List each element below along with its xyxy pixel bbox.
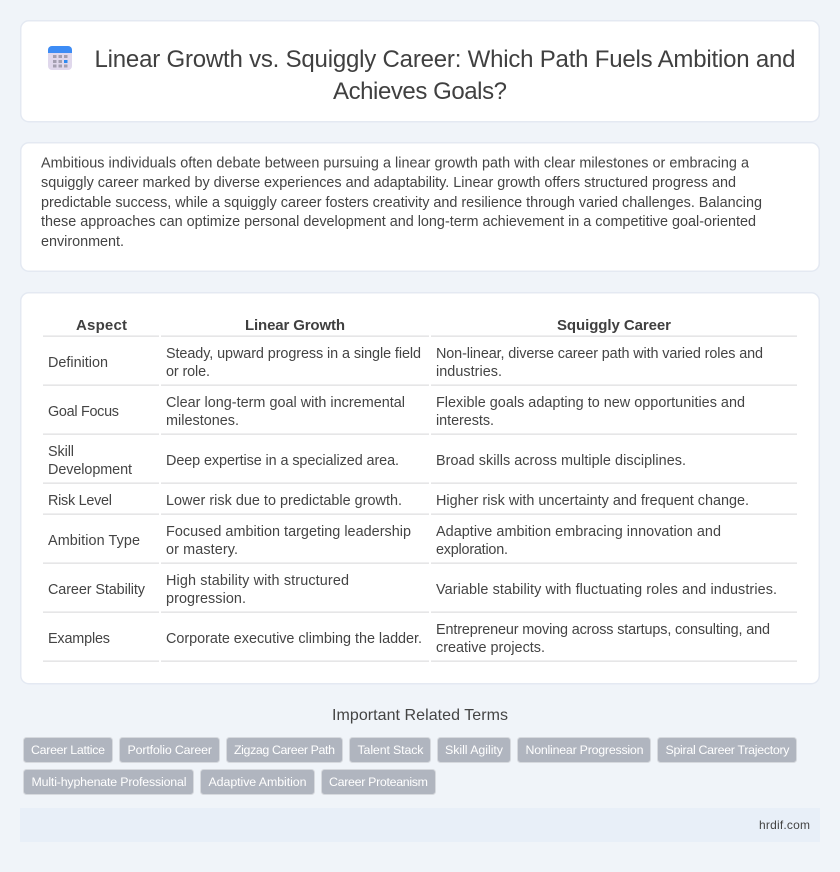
row: Ambition Type: or mastery. xyxy=(166,542,238,558)
panel: comparison table xyxy=(21,293,819,684)
row: Examples xyxy=(48,622,770,656)
row: Ambition Type: exploration. xyxy=(436,542,508,558)
table header: Squiggly Career xyxy=(557,317,671,334)
tag xyxy=(350,738,430,762)
row: Ambition Type: Ambition Type xyxy=(48,533,140,549)
tag: Multi-hyphenate Professional xyxy=(32,775,186,789)
table header: Aspect xyxy=(76,317,127,334)
table header xyxy=(76,317,671,334)
tag xyxy=(226,738,342,762)
table header: Linear Growth xyxy=(245,317,345,334)
panel: header xyxy=(21,21,819,122)
row: Goal Focus: Flexible goals adapting to new opportunities and xyxy=(436,395,745,411)
row: Skill Development: Deep expertise in a specialized area. xyxy=(166,453,399,469)
row: Ambition Type: Focused ambition targeting leadership xyxy=(166,524,411,540)
tag: Portfolio Career xyxy=(128,743,212,757)
title: Achieves Goals? xyxy=(333,78,507,105)
tag: Career Proteanism xyxy=(329,775,428,789)
row: Goal Focus: milestones. xyxy=(166,413,239,429)
row: Risk Level: Higher risk with uncertainty and frequent change. xyxy=(436,493,749,509)
row: Risk Level xyxy=(48,493,749,509)
title: Linear Growth vs. Squiggly Career: Which Path Fuels Ambition and xyxy=(94,46,796,73)
row: Career Stability: Career Stability xyxy=(48,582,146,598)
icon: calendar xyxy=(48,46,72,70)
row: Career Stability: progression. xyxy=(166,591,246,607)
row: Career Stability: High stability with structured xyxy=(166,573,349,589)
row: Definition: Non-linear, diverse career path with varied roles and xyxy=(436,346,763,362)
row: Skill Development: Broad skills across multiple disciplines. xyxy=(436,453,686,469)
row: Goal Focus: interests. xyxy=(436,413,494,429)
tag xyxy=(322,770,436,794)
tag xyxy=(24,738,112,762)
tag xyxy=(518,738,650,762)
row: Ambition Type xyxy=(48,524,721,558)
row: Ambition Type: Adaptive ambition embracing innovation and xyxy=(436,524,721,540)
footer xyxy=(20,808,820,842)
panel: intro text: Ambitious individuals often debate between pursuing a linear growth path with clear milestones or embracing a xyxy=(41,156,749,172)
heading: related terms: Important Related Terms xyxy=(332,707,508,724)
row: Career Stability xyxy=(48,573,777,607)
footer: hrdif.com xyxy=(759,818,810,832)
tag: Nonlinear Progression xyxy=(526,743,644,757)
panel: intro text: predictable success, while a squiggly career fosters creativity and resilience through varied challenges. Balancing xyxy=(41,195,762,211)
tag xyxy=(200,770,314,794)
row: Goal Focus: Clear long-term goal with incremental xyxy=(166,395,405,411)
tag xyxy=(438,738,510,762)
tag xyxy=(24,770,194,794)
tag: Skill Agility xyxy=(445,743,504,757)
row: Examples: Corporate executive climbing the ladder. xyxy=(166,631,422,647)
row: Goal Focus: Goal Focus xyxy=(48,404,119,420)
tag: Career Lattice xyxy=(31,743,105,757)
row: Definition: or role. xyxy=(166,364,210,380)
title xyxy=(94,46,796,105)
row: Risk Level: Risk Level xyxy=(48,493,112,509)
row: Definition: Definition xyxy=(48,355,108,371)
row: Examples: Examples xyxy=(48,631,110,647)
tag: Adaptive Ambition xyxy=(208,775,307,789)
row: Definition: industries. xyxy=(436,364,502,380)
row: Examples: Entrepreneur moving across startups, consulting, and xyxy=(436,622,770,638)
tag xyxy=(658,738,796,762)
row: Definition: Steady, upward progress in a single field xyxy=(166,346,421,362)
row: Definition xyxy=(48,346,763,380)
panel: intro text: environment. xyxy=(41,234,124,250)
row: Goal Focus xyxy=(48,395,745,429)
row: Risk Level: Lower risk due to predictable growth. xyxy=(166,493,402,509)
panel: intro text xyxy=(21,143,819,271)
tag: Spiral Career Trajectory xyxy=(666,743,790,757)
panel: related term tags xyxy=(24,738,796,794)
panel: intro text: these approaches can optimize personal development and long-term achievement in a competitive goal-oriented xyxy=(41,214,756,230)
row: Skill Development xyxy=(48,444,686,478)
tag: Zigzag Career Path xyxy=(234,743,335,757)
row: Career Stability: Variable stability with fluctuating roles and industries. xyxy=(436,582,777,598)
tag xyxy=(120,738,220,762)
row: Skill Development: Skill xyxy=(48,444,74,460)
row: Examples: creative projects. xyxy=(436,640,545,656)
panel: intro text: squiggly career marked by diverse experiences and adaptability. Linear growth offers structured progress and xyxy=(41,175,736,191)
row: Skill Development: Development xyxy=(48,462,132,478)
tag: Talent Stack xyxy=(358,743,424,757)
